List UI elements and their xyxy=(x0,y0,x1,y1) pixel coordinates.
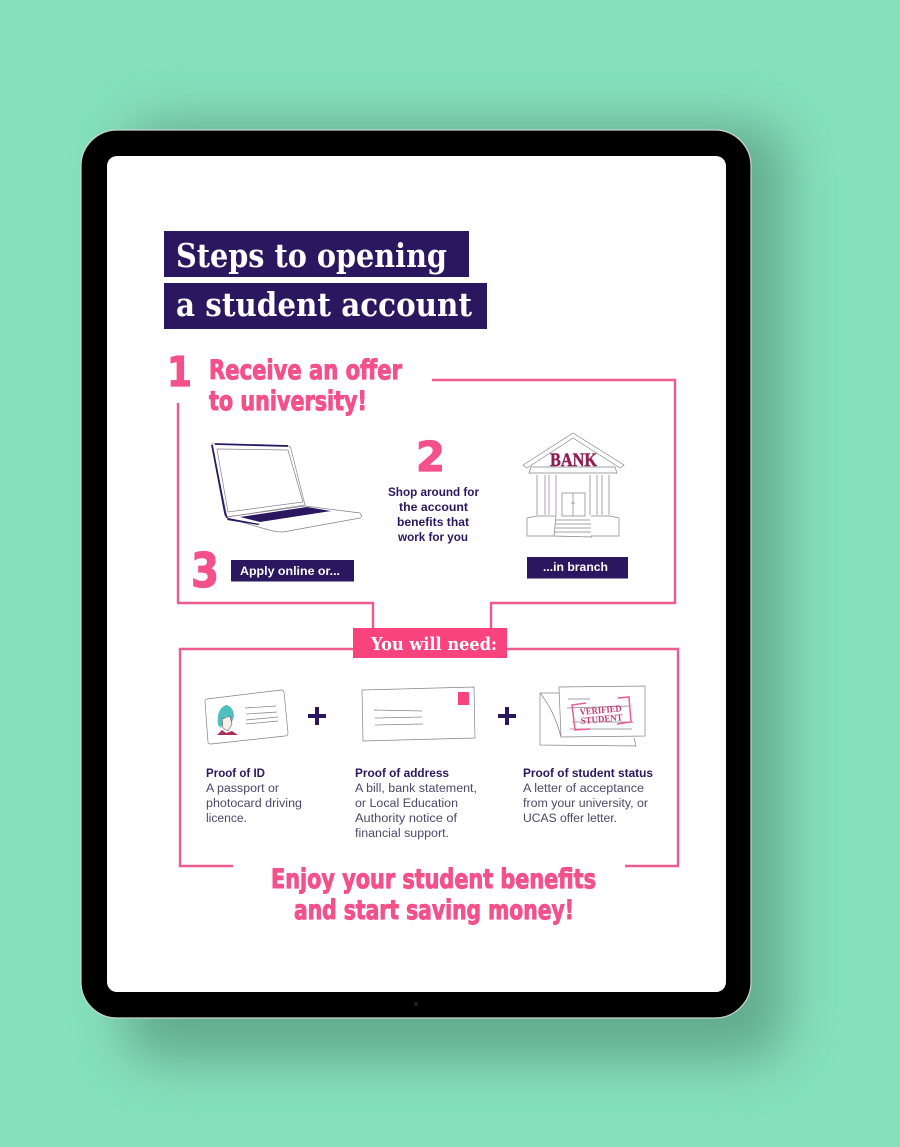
text: proof of ID: A passport or xyxy=(206,783,279,795)
step 1 heading xyxy=(209,355,403,417)
text: proof of student status: from your university, or xyxy=(523,798,648,810)
icon: bank xyxy=(523,433,624,537)
icon: bank: BANK xyxy=(550,450,597,471)
text: proof of student status: A letter of acceptance xyxy=(523,783,644,795)
label: apply online xyxy=(231,560,354,582)
text: proof of ID: photocard driving xyxy=(206,798,302,810)
step 1 number: 1 xyxy=(167,348,192,396)
step 1 heading: Receive an offer xyxy=(209,355,403,386)
text: proof of address: Proof of address xyxy=(355,768,449,780)
text: proof of ID: Proof of ID xyxy=(206,768,265,780)
step 2 text xyxy=(388,487,480,544)
text: proof of student status: Proof of student status xyxy=(523,768,653,780)
step 2 text: benefits that xyxy=(397,517,469,529)
text: proof of student status xyxy=(523,768,653,825)
tablet device xyxy=(81,130,751,1018)
text: proof of address: Authority notice of xyxy=(355,813,458,825)
text: proof of ID xyxy=(206,768,302,825)
icon: laptop xyxy=(212,444,362,532)
verified stamp: STUDENT xyxy=(580,713,624,727)
id portrait xyxy=(217,705,238,735)
icon: ID card xyxy=(205,690,288,744)
step 2 number: 2 xyxy=(416,433,445,481)
step 2 text: work for you xyxy=(397,532,468,544)
closing message: and start saving money! xyxy=(294,895,574,926)
tablet shadow xyxy=(125,125,785,1060)
verified stamp: VERIFIED xyxy=(579,704,622,718)
label: in branch: ...in branch xyxy=(543,560,608,574)
verified stamp xyxy=(572,697,631,730)
text: proof of student status: UCAS offer letter. xyxy=(523,813,617,825)
label: apply online: Apply online or... xyxy=(240,564,340,578)
title: a student account xyxy=(176,285,473,324)
step 2 text: Shop around for xyxy=(388,487,480,499)
closing message xyxy=(271,864,596,926)
label: in branch xyxy=(527,557,628,578)
title: Steps to opening xyxy=(176,236,447,275)
plus sign xyxy=(498,707,516,725)
frame: steps xyxy=(178,380,675,630)
text: proof of address xyxy=(355,768,477,840)
text: proof of address: A bill, bank statement, xyxy=(355,783,477,795)
step 3 number: 3 xyxy=(191,544,219,599)
text: proof of ID: licence. xyxy=(206,813,247,825)
laptop keyboard xyxy=(240,507,331,522)
icon: verified document xyxy=(540,686,645,746)
text: proof of address: or Local Education xyxy=(355,798,458,810)
text: proof of address: financial support. xyxy=(355,828,449,840)
title xyxy=(164,231,487,329)
closing message: Enjoy your student benefits xyxy=(271,864,596,895)
plus sign xyxy=(308,707,326,725)
icon: envelope xyxy=(362,687,475,741)
step 1 heading: to university! xyxy=(209,386,367,417)
step 2 text: the account xyxy=(399,502,468,514)
frame: you will need xyxy=(180,649,678,866)
you will need badge xyxy=(353,628,507,658)
you will need badge: You will need: xyxy=(370,634,497,655)
